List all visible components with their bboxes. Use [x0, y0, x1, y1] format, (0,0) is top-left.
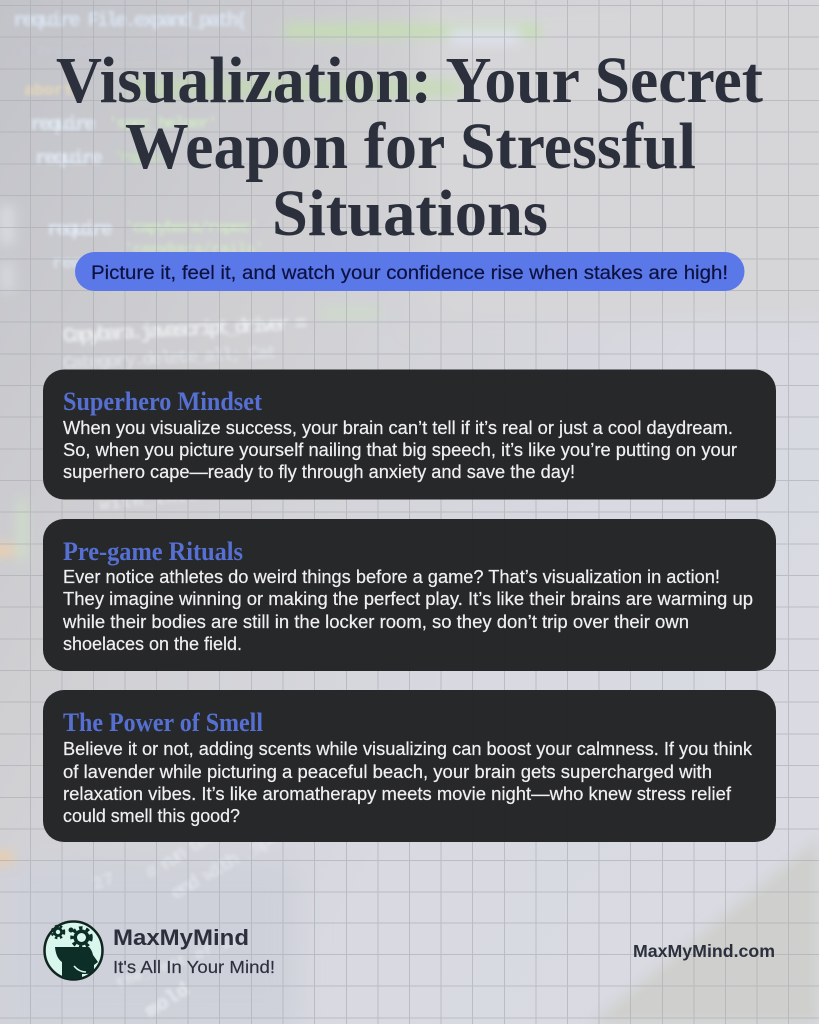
background photo: blurred code screen: 'capybara/rspec'	[124, 219, 259, 238]
background photo: blurred code screen: end with _spec.	[167, 816, 300, 906]
title	[56, 44, 763, 250]
title: Visualization: Your Secret	[56, 44, 763, 117]
panel: The Power of Smell	[43, 690, 776, 842]
background photo: blurred code screen: 'rspec/r	[113, 149, 173, 168]
background photo: blurred code screen: # run tests	[142, 816, 234, 886]
body text: The Power of Smell: could smell this good?	[63, 806, 240, 826]
background photo: blurred code screen: 27	[90, 869, 118, 896]
body text: The Power of Smell: of lavender while picturing a peaceful beach, your brain gets supercharged with	[63, 762, 712, 782]
body text: The Power of Smell: Believe it or not, adding scents while visualizing can boost your calmness. If you think	[63, 739, 753, 759]
subtitle pill: Picture it, feel it, and watch your confidence rise when stakes are high!	[91, 262, 728, 284]
background photo: blurred code screen: Capybara.javascript_driver =	[62, 313, 308, 349]
background photo: blurred code screen: require File.expand_path(	[13, 10, 248, 33]
body text: The Power of Smell: relaxation vibes. It’s like aromatherapy meets movie night—who knew stress relief	[63, 784, 732, 804]
subtitle pill	[75, 252, 744, 291]
body text: Superhero Mindset	[63, 418, 737, 482]
background photo: blurred code screen: 'capybara/rails'	[124, 241, 264, 258]
heading: Pre-game Rituals: Pre-game Rituals	[63, 537, 243, 566]
brand tagline: It's All In Your Mind!	[113, 957, 275, 977]
website url: MaxMyMind.com	[633, 941, 775, 961]
background photo: blurred code screen: require	[30, 114, 96, 137]
body text: Pre-game Rituals: Ever notice athletes do weird things before a game? That’s visualization in action!	[63, 567, 720, 587]
body text: Superhero Mindset: When you visualize success, your brain can’t tell if it’s real or just a cool daydream.	[63, 418, 733, 438]
background photo: blurred code screen: with_them	[99, 487, 200, 516]
brand name: MaxMyMind	[113, 925, 249, 950]
title: Weapon for Stressful	[125, 110, 696, 183]
body text: Pre-game Rituals: They imagine winning or making the perfect play. It’s like their brains are warming up	[63, 589, 753, 609]
background photo: blurred code screen: 'spec_helper'	[108, 115, 218, 134]
body text: Pre-game Rituals	[62, 567, 753, 654]
title: Situations	[272, 177, 548, 250]
panel: Superhero Mindset	[43, 370, 776, 500]
panel: Pre-game Rituals	[43, 519, 776, 671]
body text: Pre-game Rituals: while their bodies are still in the locker room, so they don’t trip over their own	[62, 612, 689, 632]
body text: Superhero Mindset: So, when you picture yourself nailing that big speech, it’s like you’re putting on your	[63, 440, 737, 460]
body text: The Power of Smell	[63, 739, 753, 826]
background photo: blurred code screen: abort	[24, 82, 74, 101]
body text: Superhero Mindset: superhero cape—ready to fly through anxiety and save the day!	[63, 462, 575, 482]
background photo: blurred code screen: the_rest_of_it	[114, 932, 242, 993]
background photo: blurred code screen: # Prevent database truncation	[20, 44, 270, 63]
heading: Superhero Mindset: Superhero Mindset	[63, 387, 262, 416]
background photo: blurred code screen: require	[47, 219, 113, 242]
body text: Pre-game Rituals: shoelaces on the field.	[63, 634, 242, 654]
background photo: blurred code screen: req	[52, 254, 82, 274]
background photo: blurred code screen: mold	[142, 979, 194, 1024]
background photo: blurred code screen: Category.delete_all; Cat	[62, 342, 278, 375]
heading: The Power of Smell: The Power of Smell	[63, 708, 263, 737]
icon: MaxMyMind logo, head with gears	[44, 922, 102, 980]
background photo: blurred code screen: require	[35, 148, 103, 171]
